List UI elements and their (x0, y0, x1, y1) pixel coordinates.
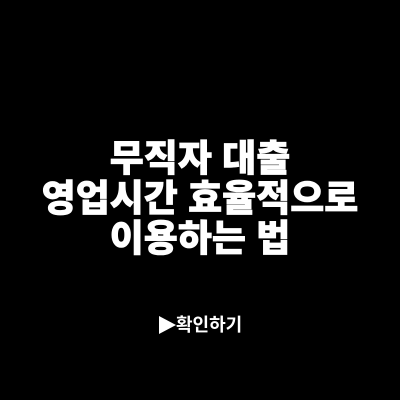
icon: play triangle (159, 316, 176, 334)
call to action text: 확인하기 (176, 315, 242, 335)
title: 영업시간 효율적으로 (42, 178, 358, 219)
title: 이용하는 법 (110, 218, 290, 259)
title: 무직자 대출 (110, 138, 290, 179)
call to action (159, 315, 242, 335)
title (42, 138, 358, 259)
